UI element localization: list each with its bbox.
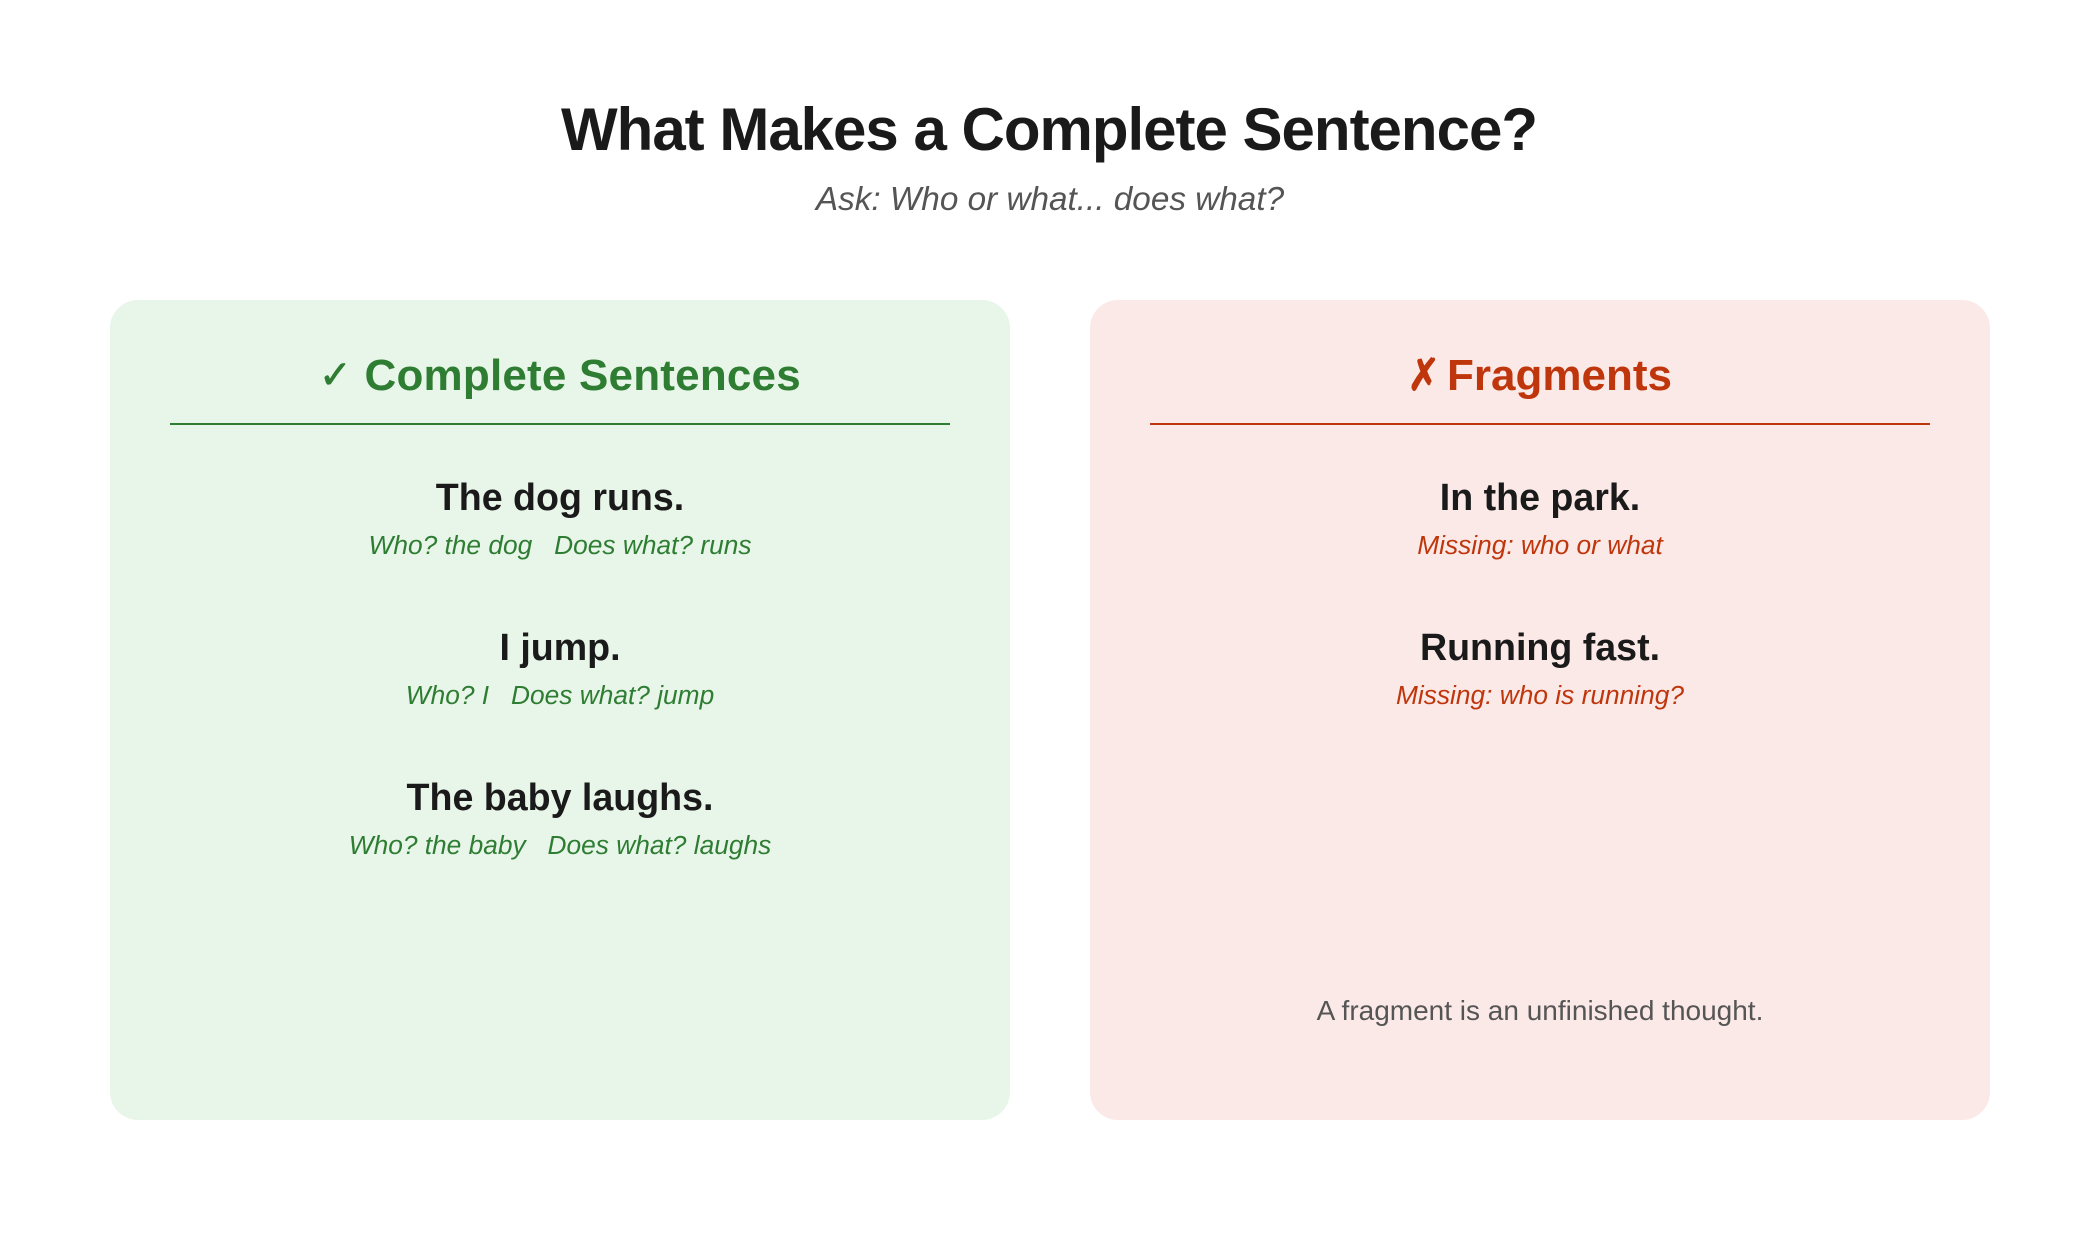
- title: What Makes a Complete Sentence?: [561, 96, 1537, 163]
- example: the baby laughs: The baby laughs.: [407, 776, 713, 818]
- example: the dog runs: The dog runs.: [436, 476, 684, 518]
- example: running fast: Running fast.: [1420, 626, 1660, 668]
- panel: complete sentences: [110, 300, 1010, 1120]
- example: I jump: I jump.: [499, 626, 621, 668]
- example: in the park: In the park.: [1440, 476, 1640, 518]
- heading: fragments: Fragments: [1447, 351, 1672, 400]
- panel: fragments: [1090, 300, 1990, 1120]
- example: I jump: [406, 626, 714, 710]
- heading: complete sentences: Complete Sentences: [364, 351, 801, 400]
- example: the baby laughs: Who? the baby Does what? laughs: [349, 830, 771, 860]
- example: I jump: Who? I Does what? jump: [406, 680, 714, 710]
- example: in the park: Missing: who or what: [1417, 530, 1664, 560]
- example: running fast: Missing: who is running?: [1396, 680, 1684, 710]
- footnote: A fragment is an unfinished thought.: [1317, 995, 1763, 1026]
- example: the baby laughs: [349, 776, 771, 860]
- subtitle: Ask: Who or what... does what?: [814, 181, 1285, 218]
- example: running fast: [1396, 626, 1684, 710]
- example: the dog runs: Who? the dog Does what? runs: [368, 530, 752, 560]
- heading: complete sentences: ✓: [319, 353, 352, 398]
- example: in the park: [1417, 476, 1664, 560]
- heading: fragments: ✗: [1408, 350, 1440, 401]
- example: the dog runs: [368, 476, 752, 560]
